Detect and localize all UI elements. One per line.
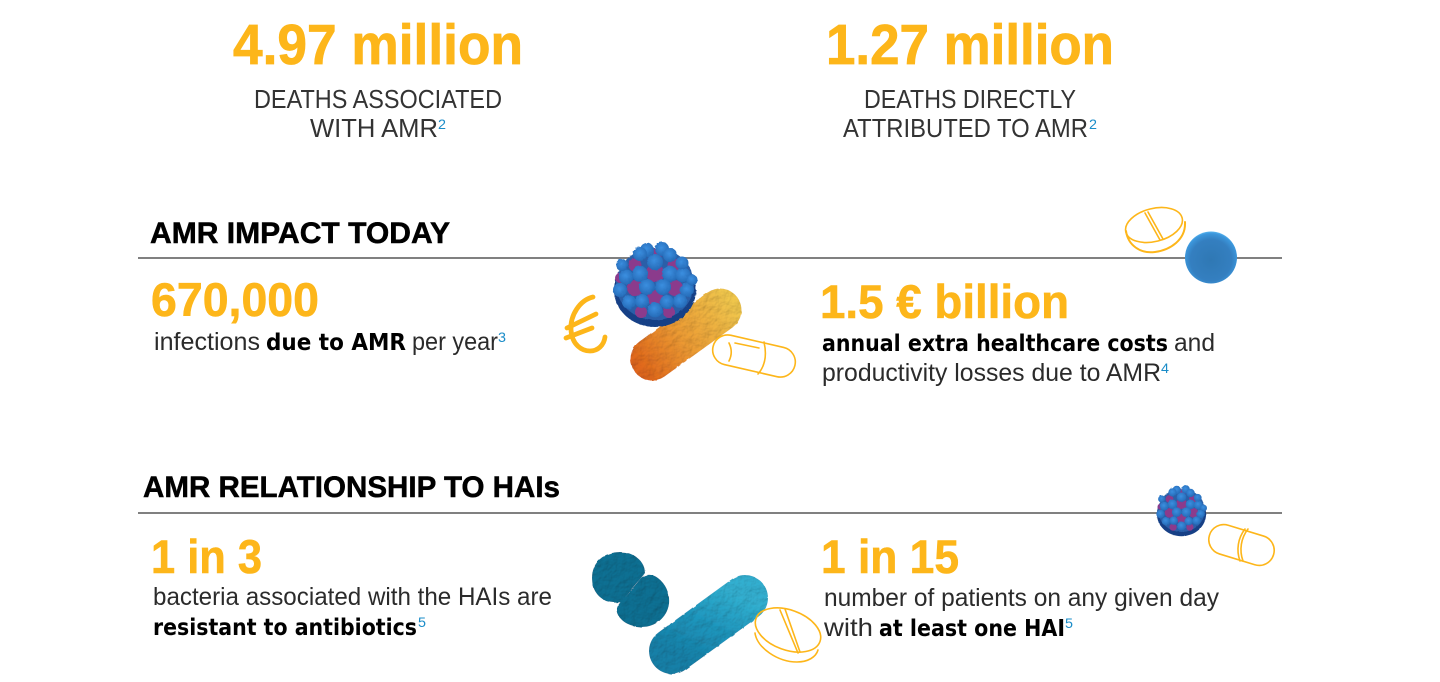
description: 4 <box>1161 360 1169 376</box>
description: annual extra healthcare costs <box>822 329 1168 357</box>
stat caption <box>843 84 1097 143</box>
description: at least one HAI <box>879 614 1065 642</box>
section: AMR relationship to HAIs <box>138 471 1282 662</box>
stat caption: ATTRIBUTED TO AMR <box>843 113 1088 143</box>
text block: 670,000 infections <box>151 273 506 356</box>
stat: 1.27 million deaths directly attributed to AMR <box>826 13 1114 143</box>
stat number: 4.97 million <box>233 13 523 77</box>
description <box>154 328 506 356</box>
illustration: small virus <box>1156 485 1207 536</box>
illustration: purple and blue virus <box>613 242 698 327</box>
heading: AMR IMPACT TODAY <box>150 217 450 250</box>
figure: 1 in 15 <box>821 530 959 583</box>
icon: outlined capsule <box>1205 521 1278 569</box>
description: productivity losses due to AMR <box>822 359 1161 387</box>
description <box>823 584 1219 642</box>
stat caption: DEATHS DIRECTLY <box>864 84 1076 114</box>
description: infections <box>154 328 260 356</box>
section: AMR impact today <box>138 202 1282 387</box>
stat caption <box>254 84 502 143</box>
description: per year <box>412 328 498 356</box>
description: resistant to antibiotics <box>153 613 417 641</box>
description: 3 <box>498 329 506 345</box>
description: 5 <box>1065 615 1073 631</box>
description: bacteria associated with the HAIs are <box>153 583 552 611</box>
illustration: orange rod bacterium <box>652 310 720 359</box>
stat: 4.97 million deaths associated with AMR <box>233 13 523 143</box>
text block: 1 in 3 bacteria <box>151 530 552 641</box>
description <box>822 329 1215 387</box>
icon: outlined tablet <box>749 600 827 662</box>
icon: outlined capsule <box>710 332 798 380</box>
illustration: teal coccus pair <box>592 552 669 627</box>
stat caption: WITH AMR <box>310 113 438 143</box>
figure: 1 in 3 <box>151 530 262 583</box>
figure: 1.5 € billion <box>820 275 1069 328</box>
stat number: 1.27 million <box>826 13 1114 77</box>
icon: blue sphere <box>1185 232 1237 284</box>
description: 5 <box>418 614 426 630</box>
description <box>153 583 552 641</box>
icon: outlined tablet <box>1122 202 1186 252</box>
illustration: teal rod bacterium <box>672 598 745 651</box>
text block: 1.5 euro billion costs <box>820 275 1215 387</box>
text block: 1 in 15 patients <box>821 530 1219 642</box>
description: due to AMR <box>266 328 406 356</box>
stat caption: 2 <box>438 116 446 132</box>
description: and <box>1174 329 1215 357</box>
stat caption: DEATHS ASSOCIATED <box>254 84 502 114</box>
icon: euro sign <box>566 297 605 351</box>
description: number of patients on any given day <box>824 584 1219 612</box>
description: with <box>823 614 873 642</box>
figure: 670,000 <box>151 273 319 326</box>
heading: AMR RELATIONSHIP TO HAIs <box>143 471 560 504</box>
stat caption: 2 <box>1089 116 1097 132</box>
